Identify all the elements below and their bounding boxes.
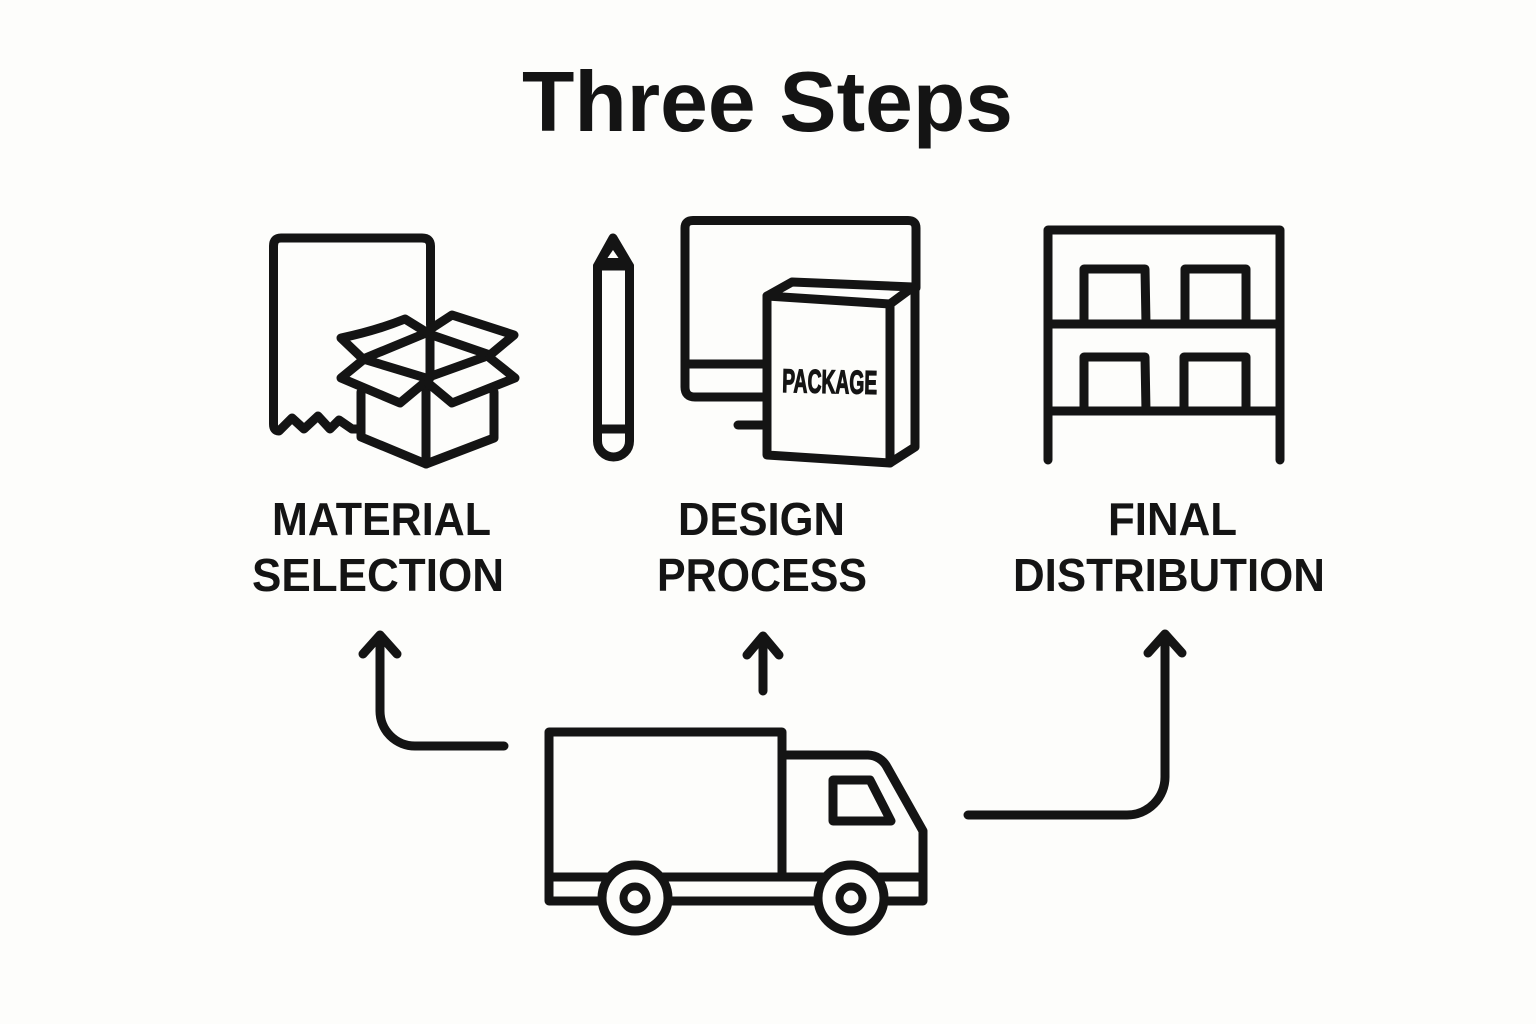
box label: PACKAGE <box>782 363 878 402</box>
arrow: truck to final distribution <box>968 634 1182 815</box>
label: material selection: MATERIAL <box>272 493 491 545</box>
icon: pencil <box>598 238 630 457</box>
label: final distribution: FINAL <box>1108 493 1237 545</box>
icon: monitor with package box <box>685 220 916 463</box>
label: design process: DESIGN <box>678 493 845 545</box>
icon: warehouse shelves <box>1048 230 1280 460</box>
label: final distribution: DISTRIBUTION <box>1013 549 1325 601</box>
label: final distribution <box>1013 493 1325 601</box>
material sheet <box>274 238 430 431</box>
label: material selection <box>252 493 504 601</box>
monitor <box>685 220 916 397</box>
label: design process <box>657 493 867 601</box>
label: design process: PROCESS <box>657 549 867 601</box>
label: material selection: SELECTION <box>252 549 504 601</box>
arrow: truck to design process <box>747 636 779 691</box>
title: Three Steps <box>522 55 1013 150</box>
icon: material sheet and open box <box>274 238 515 464</box>
open box <box>341 315 515 464</box>
icon: delivery truck <box>549 732 923 931</box>
arrow: truck to material selection <box>363 635 504 746</box>
rear wheel <box>602 865 668 931</box>
front wheel <box>818 865 884 931</box>
package box <box>767 282 915 463</box>
